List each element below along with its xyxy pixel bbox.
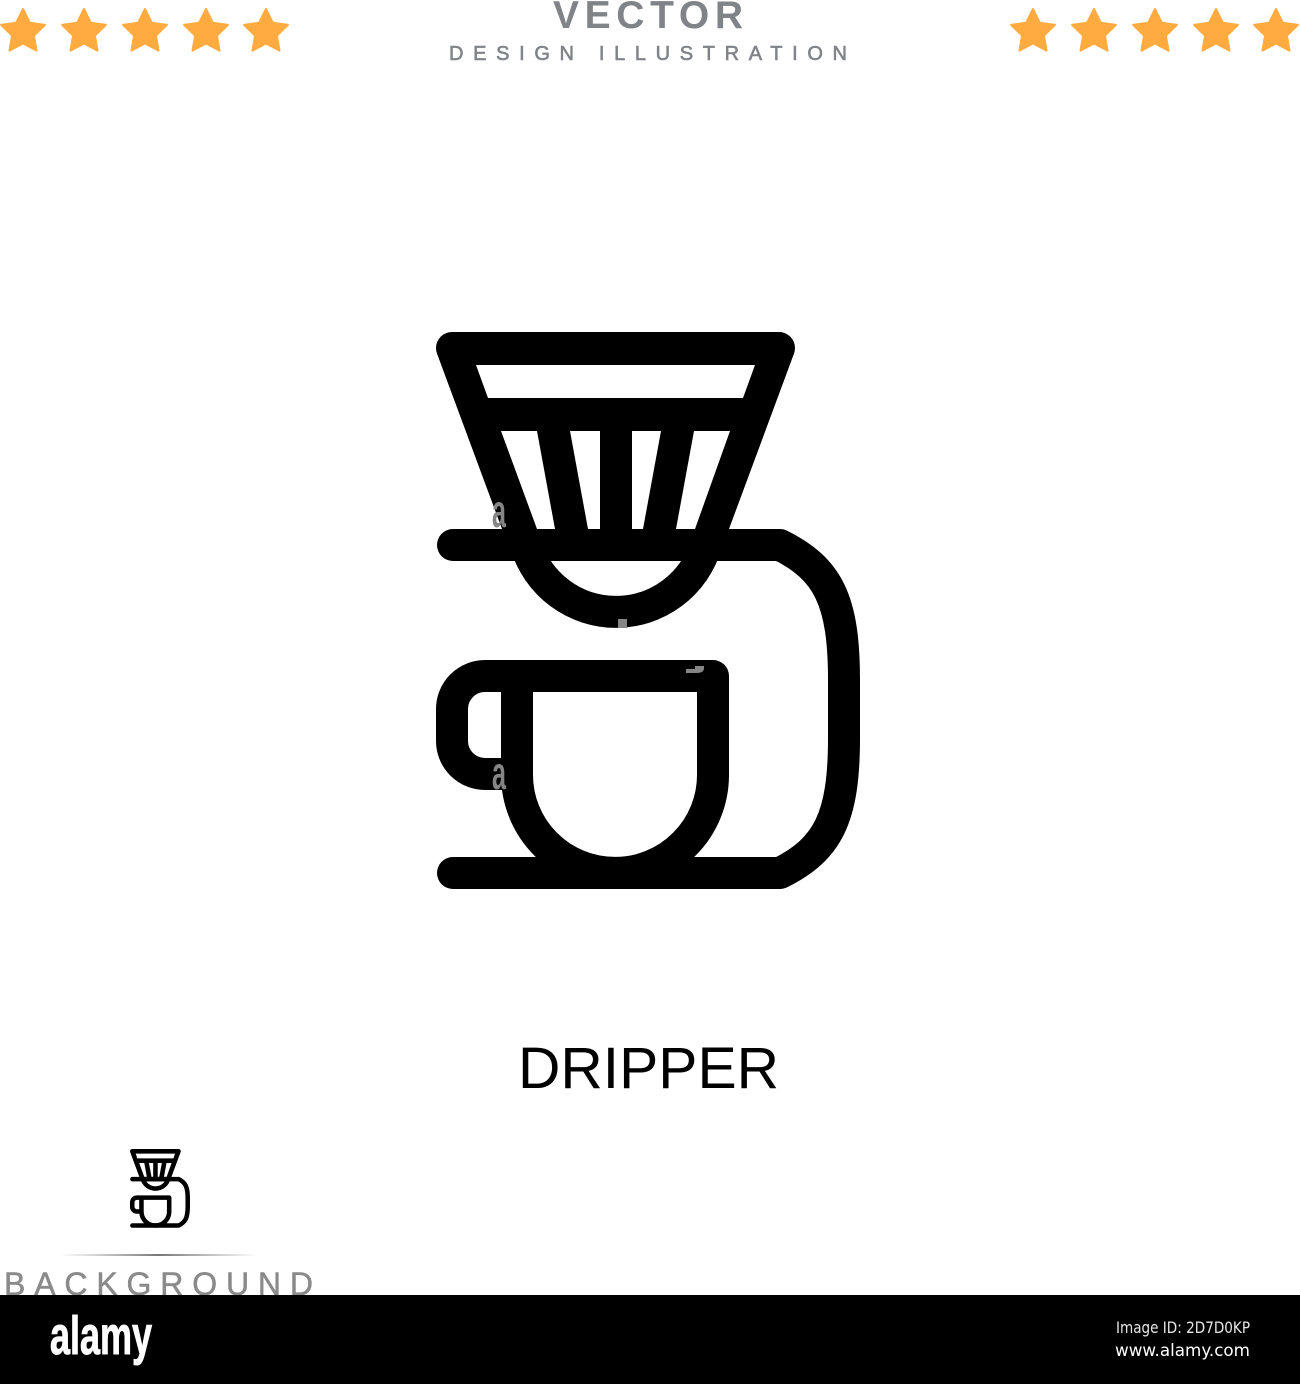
- label: BACKGROUND: BACKGROUND: [4, 1266, 313, 1302]
- icon: large coffee dripper: [452, 348, 844, 873]
- watermark fragment: a: [492, 485, 506, 537]
- divider line: [60, 1254, 258, 1256]
- cup handle: [452, 676, 517, 774]
- footer logo: alamy: alamy: [50, 1306, 152, 1366]
- footer url: www.alamy.com: [1115, 1341, 1250, 1361]
- watermark fragment: [618, 619, 627, 628]
- right star rating: [1011, 9, 1298, 51]
- label: DRIPPER: DRIPPER: [518, 1036, 779, 1101]
- coffee cup: [517, 676, 713, 873]
- left star rating: [1, 9, 288, 51]
- dripper funnel body: [452, 348, 779, 545]
- watermark fragment: [686, 666, 704, 673]
- footer bar: [0, 1295, 1300, 1384]
- icon: small coffee dripper: [132, 1151, 188, 1226]
- funnel openings: [476, 365, 755, 529]
- footer image id: Image ID: 2D7D0KP: [1116, 1318, 1250, 1337]
- subheading: DESIGN ILLUSTRATION: DESIGN ILLUSTRATION: [449, 43, 847, 65]
- watermark fragment: a: [492, 747, 506, 799]
- drip bowl arc: [526, 545, 706, 612]
- machine body with shelf and base: [453, 545, 844, 873]
